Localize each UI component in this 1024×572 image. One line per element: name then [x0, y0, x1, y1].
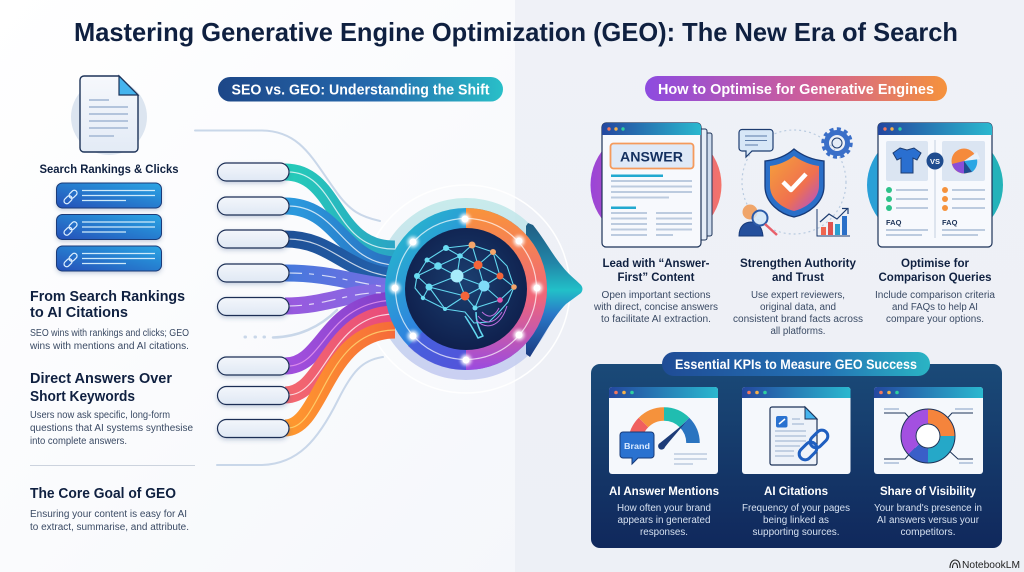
description: to facilitate AI extraction.	[601, 314, 711, 325]
link cards	[56, 183, 162, 271]
icon: gauge	[620, 414, 707, 464]
text block: direct answers over short keywords: questions that AI systems synthesise	[30, 423, 193, 434]
description: being linked as	[763, 515, 829, 526]
FAQ labels	[886, 218, 985, 235]
panel: authority and trust	[733, 129, 863, 337]
diagram: keyword pills flowing into AI brain	[195, 130, 582, 465]
text block: from search rankings to AI citations	[29, 289, 189, 352]
heading pill: how to optimise	[645, 76, 947, 101]
icon: neural brain	[414, 242, 517, 338]
description: responses.	[640, 527, 688, 538]
background: left half	[0, 0, 516, 572]
heading: AI Answer Mentions	[609, 486, 719, 498]
heading pill: KPIs: Essential KPIs to Measure GEO Success	[675, 357, 917, 372]
check rows	[886, 187, 985, 211]
text block: direct answers over short keywords	[30, 371, 193, 447]
panel: traditional search	[40, 76, 179, 271]
keyword pills	[218, 163, 289, 438]
t-shirt	[893, 148, 921, 173]
KPI card: AI citations	[742, 387, 850, 538]
shield	[765, 149, 824, 217]
VS badge: VS	[930, 157, 940, 166]
FAQ labels: FAQ	[886, 218, 902, 227]
description: Include comparison criteria	[875, 290, 995, 301]
heading pill: KPIs	[662, 352, 930, 376]
icon: document with chain	[770, 407, 830, 465]
flow streams	[285, 172, 395, 428]
text block: from search rankings to AI citations: wins with mentions and AI citations.	[29, 341, 189, 352]
description: How often your brand	[617, 503, 711, 514]
text block: core goal of GEO: Ensuring your content is easy for AI	[30, 509, 187, 520]
heading: AI Citations	[764, 486, 828, 498]
text block: direct answers over short keywords: into complete answers.	[30, 436, 127, 447]
heading pill: SEO vs GEO: SEO vs. GEO: Understanding the Shift	[232, 82, 490, 98]
text block: from search rankings to AI citations: SEO wins with rankings and clicks; GEO	[30, 328, 189, 339]
description: Use expert reviewers,	[751, 290, 845, 301]
icon: shield with surrounding symbols	[739, 129, 851, 236]
description	[875, 290, 995, 325]
panel: comparison queries	[867, 123, 1003, 325]
panel: KPIs	[591, 352, 1002, 548]
outer ring and halo	[362, 185, 570, 393]
text block: from search rankings to AI citations: From Search Rankings	[30, 289, 185, 305]
icon: comparison page	[867, 123, 1003, 247]
icon: gauge: Brand	[624, 441, 650, 451]
description: consistent brand facts across	[733, 314, 863, 325]
reviewer with magnifier	[739, 204, 777, 236]
panel: answer-first content	[590, 123, 722, 325]
heading: Share of Visibility	[880, 486, 977, 498]
heading	[602, 256, 710, 284]
text block: core goal of GEO	[30, 486, 189, 533]
heading: Comparison Queries	[878, 270, 992, 284]
text block: from search rankings to AI citations: to AI Citations	[30, 305, 128, 321]
heading: and Trust	[772, 270, 824, 284]
text block: core goal of GEO: The Core Goal of GEO	[30, 486, 176, 502]
pie chart	[952, 148, 980, 174]
heading: search rankings and clicks: Search Rankings & Clicks	[40, 162, 179, 176]
icon: donut chart	[884, 409, 973, 463]
icon: answer document	[590, 123, 722, 247]
description	[742, 503, 850, 538]
description: with direct, concise answers	[593, 302, 718, 313]
text block: direct answers over short keywords: Short Keywords	[30, 389, 135, 405]
description: appears in generated	[618, 515, 710, 526]
arrow behind hub	[526, 223, 582, 357]
ring nodes	[390, 214, 542, 366]
KPI card: share of visibility	[874, 387, 983, 538]
FAQ labels: FAQ	[942, 218, 958, 227]
description: all platforms.	[770, 326, 826, 337]
description: original data, and	[760, 302, 836, 313]
growth chart	[817, 208, 850, 236]
background: right half	[515, 0, 1024, 572]
heading pill: how to optimise: How to Optimise for Generative Engines	[658, 82, 934, 98]
chat bubble	[739, 130, 773, 157]
description	[617, 503, 711, 538]
description: Frequency of your pages	[742, 503, 850, 514]
heading	[740, 256, 856, 284]
description: Open important sections	[602, 290, 710, 301]
heading: Optimise for	[901, 256, 969, 270]
description: supporting sources.	[752, 527, 840, 538]
text block: core goal of GEO: to extract, summarise, and attribute.	[30, 522, 189, 533]
KPI card: AI answer mentions	[609, 387, 719, 538]
heading	[878, 256, 992, 284]
gear	[823, 129, 851, 157]
description: and FAQs to help AI	[892, 302, 978, 313]
heading pill: SEO vs GEO	[218, 77, 503, 102]
description: AI answers versus your	[877, 515, 980, 526]
heading: First” Content	[618, 270, 694, 284]
description	[593, 290, 718, 325]
watermark: NotebookLM: NotebookLM	[962, 560, 1020, 571]
description: compare your options.	[886, 314, 984, 325]
text block: direct answers over short keywords: Users now ask specific, long-form	[30, 410, 170, 421]
decorative curve lines	[195, 130, 383, 465]
title: Mastering Generative Engine Optimization (GEO): The New Era of Search	[74, 17, 958, 47]
heading: Strengthen Authority	[740, 256, 856, 270]
description: competitors.	[900, 527, 956, 538]
heading: Lead with “Answer-	[602, 256, 710, 270]
text block: direct answers over short keywords: Direct Answers Over	[30, 371, 172, 387]
description	[874, 503, 982, 538]
description: Your brand's presence in	[874, 503, 982, 514]
hub ring	[385, 208, 547, 370]
icon: answer document: ANSWER	[620, 148, 683, 164]
description	[733, 290, 863, 337]
icon: document	[71, 76, 147, 155]
